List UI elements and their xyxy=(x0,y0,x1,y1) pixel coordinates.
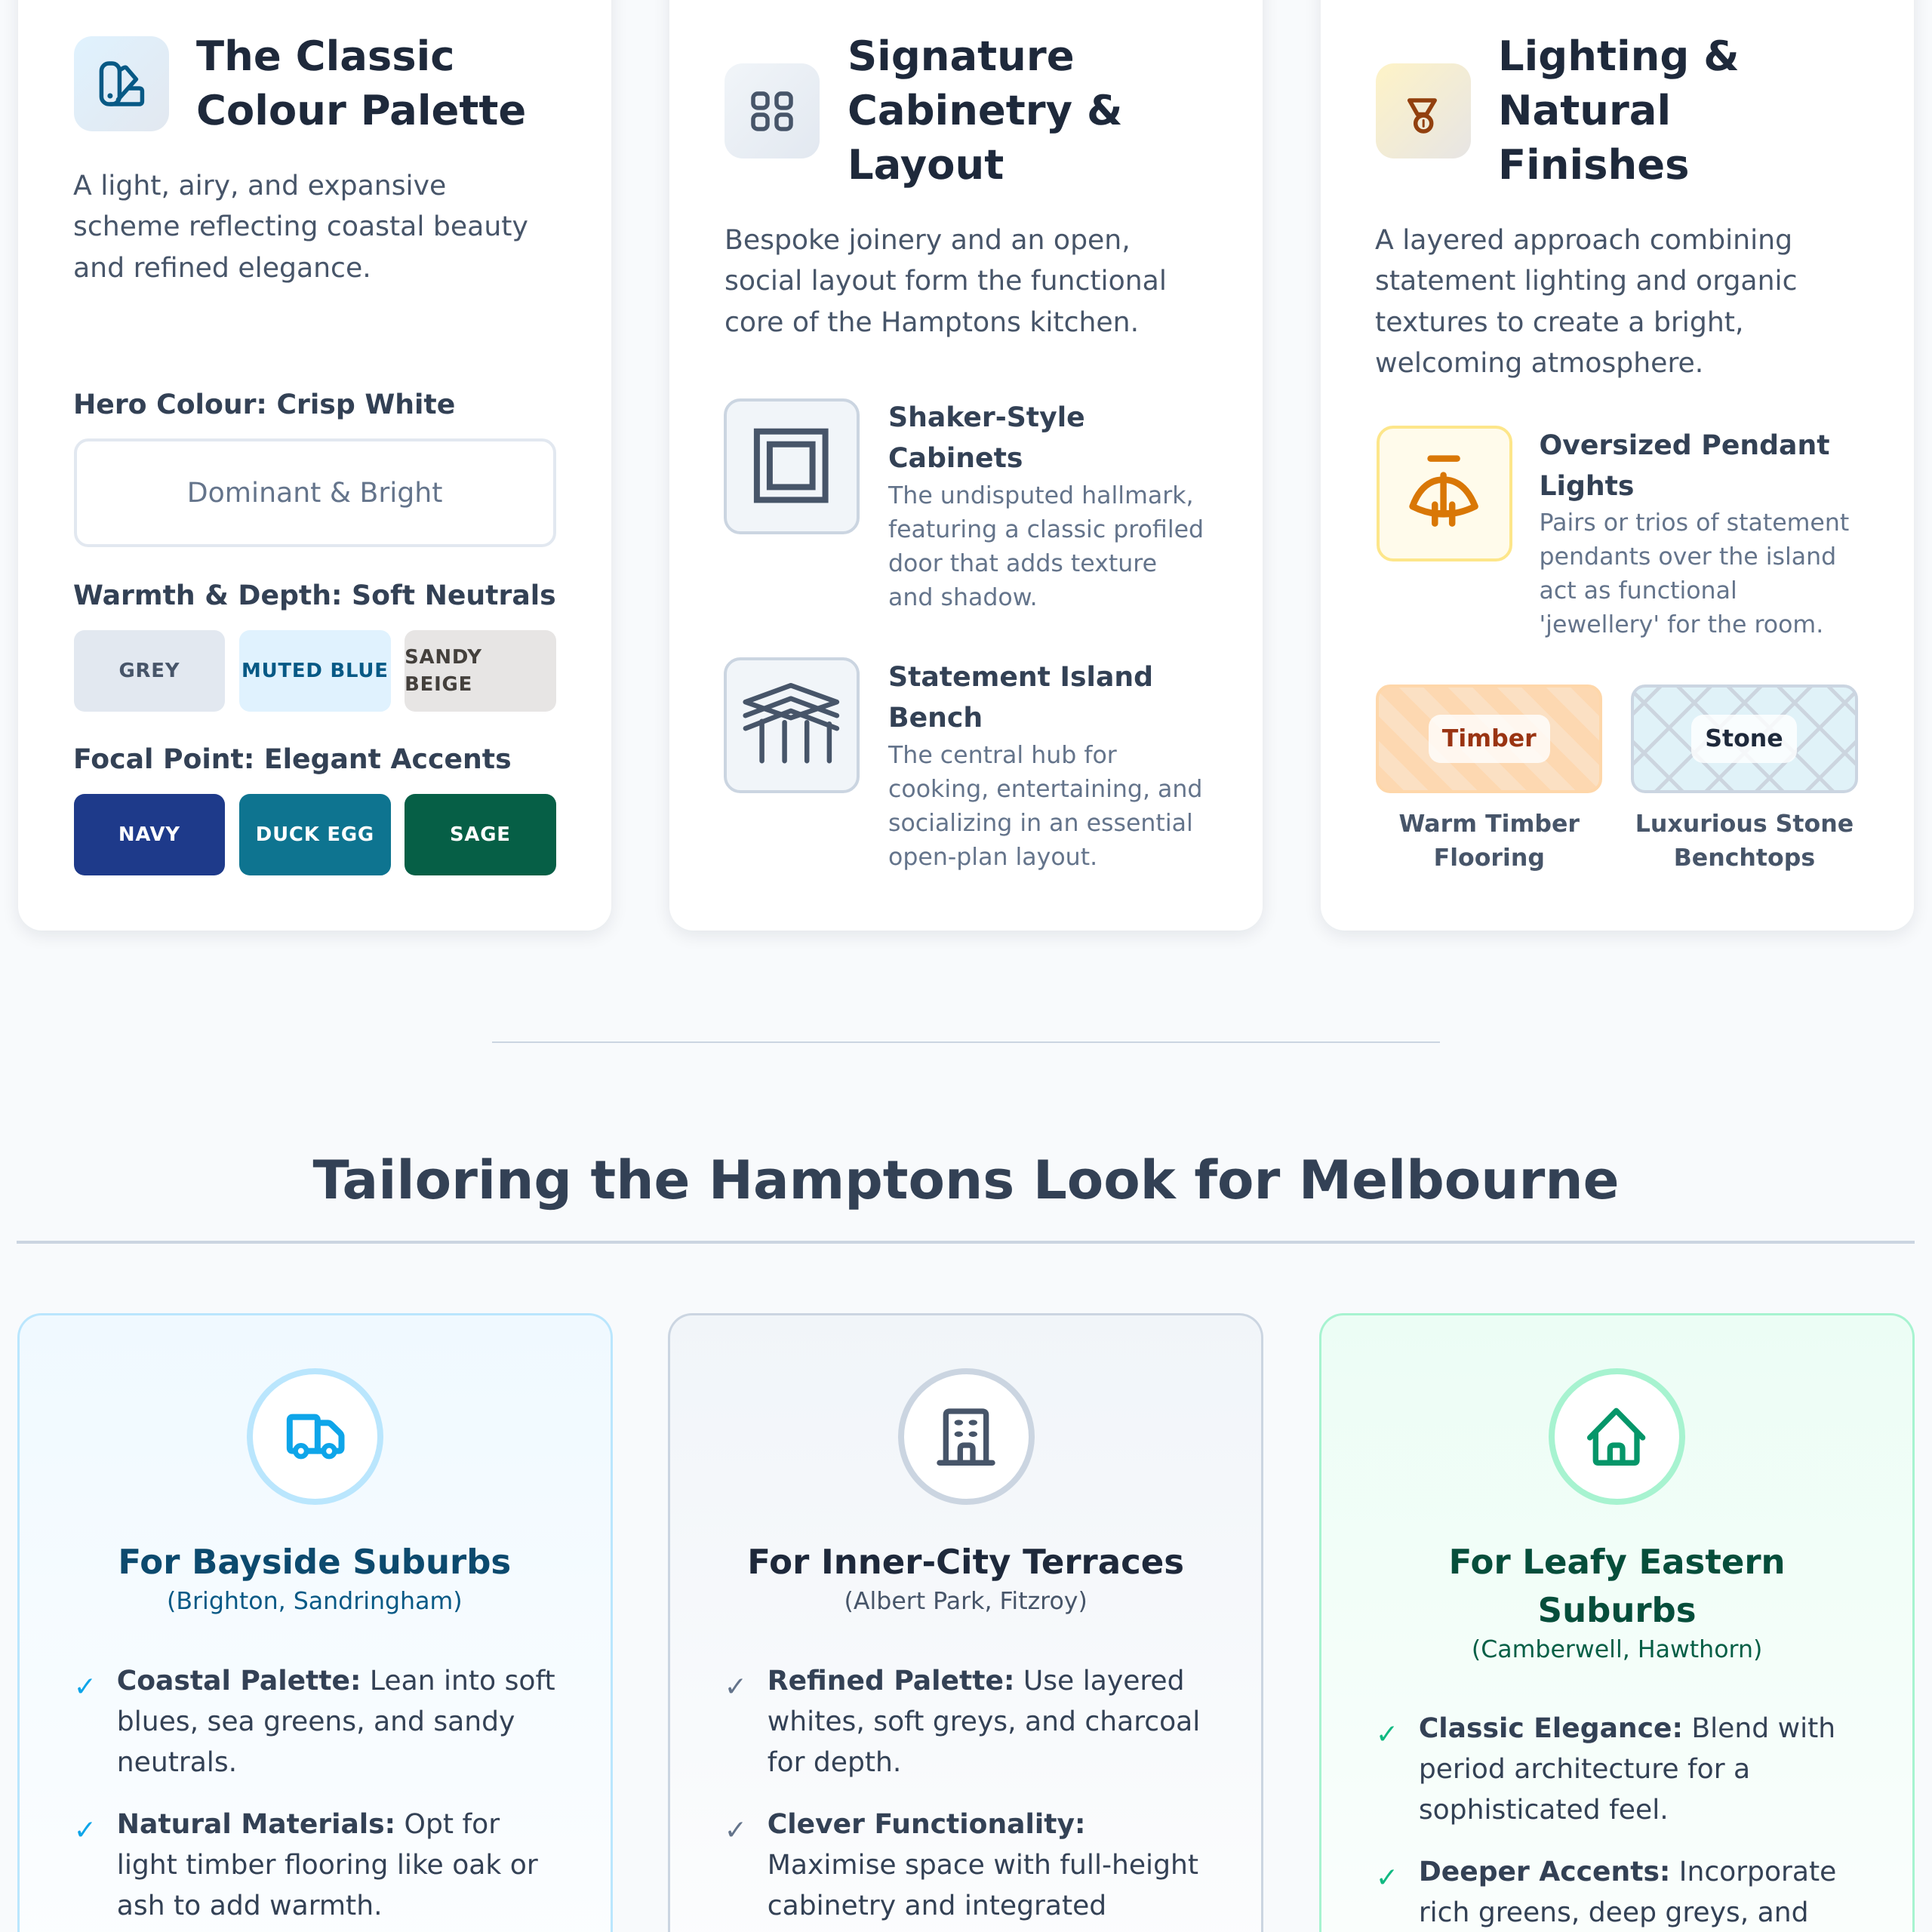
subheading: camberwell, hawthorn: (Camberwell, Hawthorn) xyxy=(1472,1636,1762,1663)
icon: pendant funnel xyxy=(1376,63,1471,158)
text: cabinetry intro: social layout form the functional xyxy=(724,264,1167,297)
list item: clever functionality: Maximise space with full-height xyxy=(768,1849,1198,1881)
feature title: shaker-style cabinets xyxy=(888,401,1085,474)
swatch: navy xyxy=(74,794,225,875)
swatch: muted blue xyxy=(239,629,391,711)
feature title: shaker-style cabinets: Cabinets xyxy=(888,441,1023,474)
swatch: duck egg xyxy=(239,794,391,875)
feature text: oversized pendant lights: Pairs or trios of statement xyxy=(1540,509,1849,537)
heading: the classic colour palette: Colour Palette xyxy=(196,87,526,134)
swatch: crisp white xyxy=(74,438,556,547)
caption: luxurious stone benchtops: Benchtops xyxy=(1674,844,1815,872)
swatch: grey xyxy=(74,629,225,711)
heading: signature cabinetry and layout: Cabinetry & xyxy=(848,87,1122,134)
list item: refined palette: whites, soft greys, and charcoal xyxy=(768,1706,1200,1737)
list item: clever functionality xyxy=(768,1808,1198,1921)
swatch: navy: NAVY xyxy=(118,823,180,846)
feature text: statement island bench: socializing in an essential xyxy=(888,810,1193,837)
label: timber xyxy=(1428,715,1550,763)
panel: signature cabinetry and layout xyxy=(669,0,1263,930)
list item: coastal palette: neutrals. xyxy=(117,1746,237,1778)
label: timber: Timber xyxy=(1442,725,1537,752)
feature text: oversized pendant lights: pendants over the island xyxy=(1540,543,1836,571)
label: warmth and depth: Warmth & Depth: Soft Neutrals xyxy=(73,579,556,611)
heading: lighting and natural finishes: Finishes xyxy=(1498,141,1690,189)
text: cabinetry intro: core of the Hamptons kitchen. xyxy=(724,306,1139,338)
feature title: shaker-style cabinets: Shaker-Style xyxy=(888,401,1085,433)
swatch: crisp white: Dominant & Bright xyxy=(187,476,442,509)
list item: natural materials: Natural Materials: Opt for xyxy=(117,1808,500,1840)
feature text: oversized pendant lights xyxy=(1540,509,1849,638)
caption: luxurious stone benchtops xyxy=(1635,811,1854,872)
icon: swatch book xyxy=(74,36,169,131)
label: hero colour: Hero Colour: Crisp White xyxy=(73,388,455,420)
label: stone: Stone xyxy=(1705,725,1783,752)
heading: for leafy eastern suburbs xyxy=(1449,1542,1786,1630)
icon: four squares xyxy=(724,63,820,158)
heading: for inner-city terraces: For Inner-City Terraces xyxy=(747,1542,1184,1582)
swatch: muted blue: MUTED BLUE xyxy=(242,660,389,682)
check mark: ✓ xyxy=(74,1815,97,1846)
section heading: Tailoring the Hamptons Look for Melbourne xyxy=(312,1149,1620,1211)
text: lighting intro: A layered approach combining xyxy=(1375,223,1792,256)
panel: inner-city terraces xyxy=(668,1313,1263,1932)
text: lighting intro: welcoming atmosphere. xyxy=(1375,346,1703,379)
swatch: sage xyxy=(405,794,556,875)
feature icon: island bench xyxy=(724,657,860,793)
check mark: ✓ xyxy=(74,1672,97,1703)
text: lighting intro xyxy=(1375,223,1797,379)
list item: coastal palette xyxy=(117,1665,555,1778)
swatch: grey: GREY xyxy=(118,660,180,682)
panel: leafy eastern suburbs xyxy=(1319,1313,1915,1932)
subheading: albert park, fitzroy: (Albert Park, Fitzroy) xyxy=(844,1588,1088,1615)
swatch: duck egg: DUCK EGG xyxy=(256,823,374,846)
feature text: statement island bench: open-plan layout. xyxy=(888,844,1097,871)
check mark: ✓ xyxy=(724,1815,747,1846)
check mark: ✓ xyxy=(724,1672,747,1703)
heading: signature cabinetry and layout: Layout xyxy=(848,141,1004,189)
label: stone xyxy=(1691,715,1797,763)
heading: lighting and natural finishes xyxy=(1498,32,1740,189)
feature text: statement island bench xyxy=(888,742,1202,871)
icon: truck xyxy=(247,1368,383,1505)
feature text: oversized pendant lights: 'jewellery' for the room. xyxy=(1540,611,1823,638)
list item: deeper accents xyxy=(1419,1856,1836,1928)
swatch: sandy beige: BEIGE xyxy=(405,673,472,696)
list item: classic elegance xyxy=(1419,1712,1835,1826)
feature text: oversized pendant lights: act as functional xyxy=(1540,577,1737,605)
feature title: statement island bench: Bench xyxy=(888,701,983,734)
heading: lighting and natural finishes: Natural xyxy=(1498,87,1671,134)
feature title: statement island bench: Statement Island xyxy=(888,660,1153,693)
panel: lighting and natural finishes xyxy=(1321,0,1914,930)
heading: signature cabinetry and layout xyxy=(848,32,1122,189)
heading: for bayside suburbs: For Bayside Suburbs xyxy=(118,1542,511,1582)
caption: warm timber flooring xyxy=(1399,811,1580,872)
text: lighting intro: textures to create a bright, xyxy=(1375,306,1743,338)
feature title: oversized pendant lights xyxy=(1540,429,1830,501)
feature text: shaker-style cabinets: The undisputed hallmark, xyxy=(888,482,1194,509)
list item: classic elegance: Classic Elegance: Blend with xyxy=(1419,1712,1835,1744)
list item: clever functionality: cabinetry and integrated xyxy=(768,1890,1106,1921)
feature text: statement island bench: cooking, entertaining, and xyxy=(888,776,1202,803)
swatch: sage: SAGE xyxy=(450,823,511,846)
feature title: oversized pendant lights: Lights xyxy=(1540,469,1634,501)
feature title: oversized pendant lights: Oversized Pendant xyxy=(1540,429,1830,460)
heading: for leafy eastern suburbs: Suburbs xyxy=(1538,1590,1697,1630)
swatch: sandy beige xyxy=(405,629,556,711)
list item: natural materials xyxy=(117,1808,538,1921)
texture: timber xyxy=(1376,685,1602,793)
caption: luxurious stone benchtops: Luxurious Stone xyxy=(1635,811,1854,838)
feature icon: shaker door xyxy=(724,398,860,534)
caption: warm timber flooring: Flooring xyxy=(1434,844,1545,872)
list item: deeper accents: Deeper Accents: Incorporate xyxy=(1419,1856,1836,1887)
check mark: ✓ xyxy=(1376,1719,1398,1750)
text: cabinetry intro: Bespoke joinery and an open, xyxy=(724,223,1131,256)
list item: natural materials: ash to add warmth. xyxy=(117,1890,383,1921)
icon: building xyxy=(898,1368,1035,1505)
list item: refined palette xyxy=(768,1665,1200,1778)
heading: the classic colour palette xyxy=(196,32,526,134)
heading: for leafy eastern suburbs: For Leafy Eastern xyxy=(1449,1542,1786,1582)
list item: classic elegance: sophisticated feel. xyxy=(1419,1794,1669,1826)
feature text: shaker-style cabinets xyxy=(888,482,1204,611)
subheading: brighton, sandringham: (Brighton, Sandringham) xyxy=(167,1588,463,1615)
feature text: statement island bench: The central hub for xyxy=(888,742,1117,769)
list item: coastal palette: blues, sea greens, and sandy xyxy=(117,1706,515,1737)
list item: classic elegance: period architecture for a xyxy=(1419,1753,1750,1785)
text: palette intro: and refined elegance. xyxy=(73,251,371,284)
icon: house xyxy=(1549,1368,1685,1505)
list item: refined palette: for depth. xyxy=(768,1746,901,1778)
text: lighting intro: statement lighting and organic xyxy=(1375,264,1797,297)
text: palette intro: A light, airy, and expansive xyxy=(73,169,446,202)
text: palette intro: scheme reflecting coastal beauty xyxy=(73,210,528,242)
texture: stone xyxy=(1631,685,1858,793)
label: focal point: Focal Point: Elegant Accents xyxy=(73,743,512,775)
feature text: shaker-style cabinets: and shadow. xyxy=(888,584,1038,611)
heading: lighting and natural finishes: Lighting & xyxy=(1498,32,1740,80)
feature icon: pendant light xyxy=(1377,426,1512,561)
feature text: shaker-style cabinets: featuring a classic profiled xyxy=(888,516,1204,543)
text: palette intro xyxy=(73,169,528,284)
feature text: shaker-style cabinets: door that adds texture xyxy=(888,550,1157,577)
heading: signature cabinetry and layout: Signature xyxy=(848,32,1075,80)
list item: coastal palette: Coastal Palette: Lean into soft xyxy=(117,1665,555,1697)
swatch: sandy beige: SANDY xyxy=(405,646,482,669)
caption: warm timber flooring: Warm Timber xyxy=(1399,811,1580,838)
list item: refined palette: Refined Palette: Use layered xyxy=(768,1665,1185,1697)
list item: deeper accents: rich greens, deep greys, and xyxy=(1419,1897,1809,1928)
feature title: statement island bench xyxy=(888,660,1153,734)
list item: clever functionality: Clever Functionality: xyxy=(768,1808,1085,1840)
panel: bayside suburbs xyxy=(17,1313,613,1932)
list item: natural materials: light timber flooring like oak or xyxy=(117,1849,538,1881)
text: cabinetry intro xyxy=(724,223,1167,338)
check mark: ✓ xyxy=(1376,1863,1398,1894)
panel: the classic colour palette xyxy=(18,0,611,930)
heading: the classic colour palette: The Classic xyxy=(196,32,455,80)
